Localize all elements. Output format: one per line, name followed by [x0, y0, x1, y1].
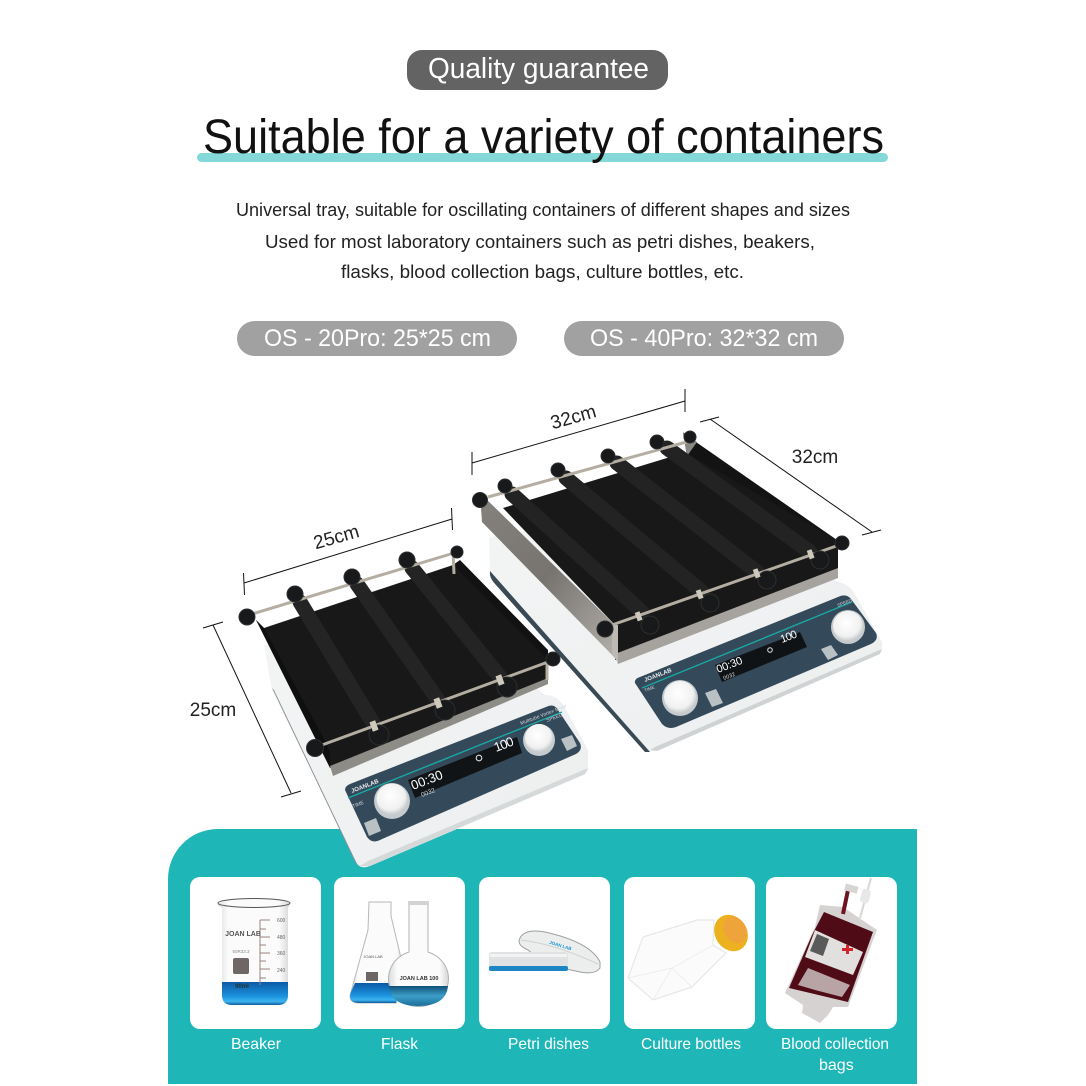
large shaker base [489, 500, 882, 751]
icon: beaker [217, 898, 290, 1005]
knobs [472, 431, 849, 637]
large shaker tray [472, 431, 849, 664]
rollers [300, 568, 500, 723]
dimension: large depth 32cm: 32cm [792, 447, 838, 468]
description text: flasks, blood collection bags, culture bottles, etc. [341, 262, 744, 282]
icon: culture bottle [628, 908, 755, 1000]
card: beaker [190, 877, 321, 1029]
icon: petri dishes [489, 931, 600, 973]
dimension: small width 25cm [244, 508, 452, 595]
small shaker control panel: 0032 [420, 787, 437, 799]
large shaker control panel: JOANLAB [644, 668, 673, 684]
dimension: large width 32cm: 32cm [548, 401, 599, 434]
card: flask [334, 877, 465, 1029]
small shaker base [264, 620, 588, 867]
small shaker control panel: Multitube Vortex Mixer [520, 703, 568, 727]
size pill: OS-20Pro: OS - 20Pro: 25*25 cm [264, 325, 491, 352]
large shaker control panel: SPEED [837, 598, 853, 608]
knobs [239, 546, 560, 756]
card: culture bottles [624, 877, 755, 1029]
icon: beaker: 90ml [235, 984, 249, 990]
large shaker control panel [635, 595, 877, 728]
card: blood collection bags [766, 877, 897, 1029]
small shaker control panel [345, 703, 581, 841]
description text: Universal tray, suitable for oscillating containers of different shapes and sizes [236, 200, 850, 220]
label: Beaker: Beaker [231, 1036, 282, 1053]
icon: flasks: JOAN LAB 100 [400, 976, 438, 982]
icon: beaker: 240 [277, 968, 286, 974]
small shaker OS-20Pro [239, 546, 588, 867]
rods [488, 441, 842, 625]
large shaker control panel: 00:30 [715, 655, 744, 676]
label: Blood collection bags: bags [819, 1057, 854, 1074]
dimension: small depth 25cm: 25cm [190, 700, 236, 721]
dimension: small width 25cm: 25cm [311, 521, 362, 554]
icon: beaker: 360 [277, 951, 286, 957]
small shaker control panel: 100 [492, 734, 516, 755]
size pill: OS-20Pro [237, 321, 517, 356]
label: Culture bottles: Culture bottles [641, 1036, 741, 1053]
label: Blood collection bags: Blood collection [781, 1036, 889, 1053]
dimension: large width 32cm [472, 389, 685, 475]
icon: beaker: JOAN LAB [225, 931, 261, 938]
icon: flasks: JOAN LAB [363, 954, 383, 959]
badge: quality guarantee: Quality guarantee [428, 53, 649, 85]
small shaker control panel: JOANLAB [351, 779, 380, 795]
large shaker control panel: 0032 [723, 672, 736, 682]
rods [252, 550, 548, 745]
large shaker control panel: TIME [644, 684, 655, 693]
large shaker control panel: 100 [779, 629, 799, 646]
size pill: OS-40Pro: OS - 40Pro: 32*32 cm [590, 325, 818, 352]
icon: blood bag [785, 878, 877, 1023]
small shaker control panel: 00:30 [409, 767, 445, 793]
badge: quality guarantee [407, 50, 668, 90]
label: Petri dishes: Petri dishes [508, 1036, 589, 1053]
icon: beaker: 480 [277, 935, 286, 941]
icon: beaker: 600 [277, 918, 286, 924]
rollers [512, 448, 810, 612]
large shaker OS-40Pro [472, 431, 882, 752]
dimension: large depth 32cm [700, 417, 881, 535]
small shaker tray [239, 546, 560, 776]
dimension: small depth 25cm [190, 622, 301, 797]
size pill: OS-40Pro [564, 321, 844, 356]
small shaker control panel: SPEED [546, 712, 564, 724]
description text: Used for most laboratory containers such as petri dishes, beakers, [265, 232, 815, 252]
icon: petri dishes: JOAN LAB [549, 940, 573, 952]
heading with underline: Suitable for a variety of containers [203, 111, 884, 164]
card: petri dishes [479, 877, 610, 1029]
small shaker control panel: TIME [352, 800, 365, 810]
label: Flask: Flask [381, 1036, 419, 1053]
teal container panel background [168, 829, 917, 1084]
description text [236, 200, 850, 282]
icon: beaker: 50R33.3 [232, 949, 250, 954]
icon: flasks [350, 901, 449, 1007]
